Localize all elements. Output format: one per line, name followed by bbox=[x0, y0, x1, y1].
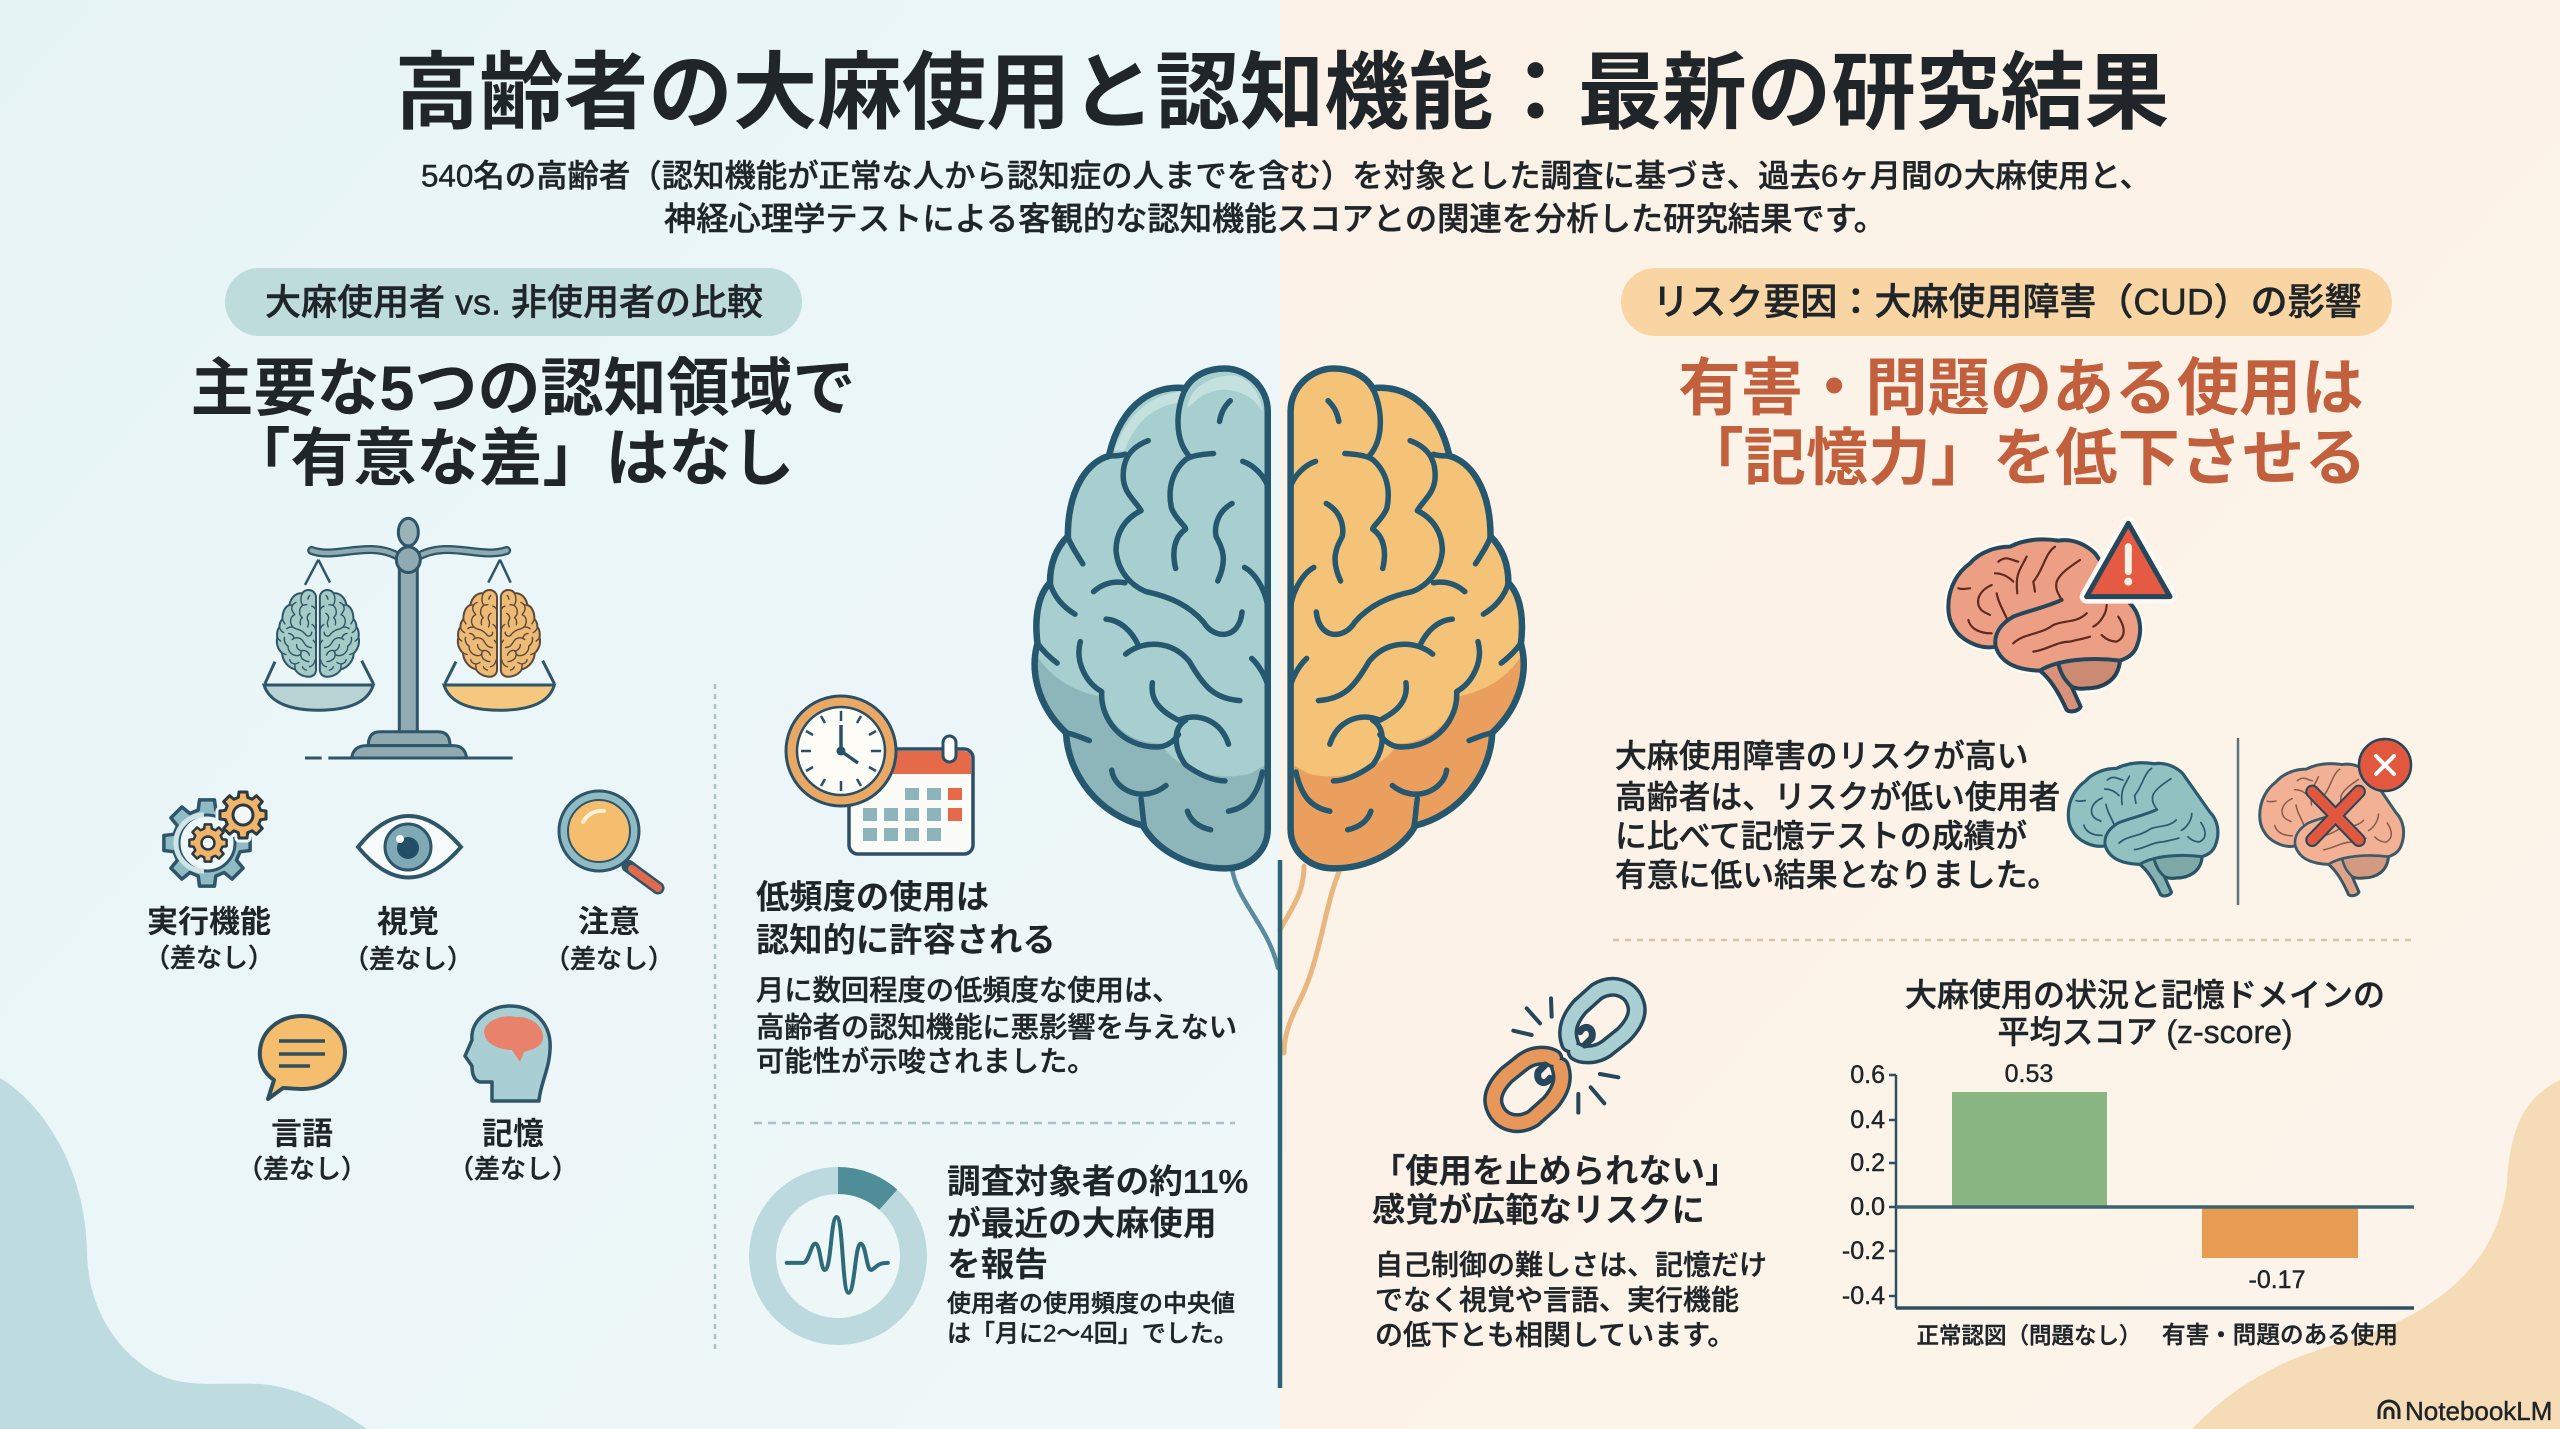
chart: memory z-score bbox=[1842, 977, 2414, 1349]
y axis: 0.4 bbox=[1850, 1106, 1885, 1134]
icon: clock bbox=[786, 696, 896, 806]
bar: normal cognition bbox=[1952, 1092, 2107, 1207]
y axis: 0.0 bbox=[1850, 1193, 1885, 1221]
text: self control bbox=[1375, 1250, 1767, 1350]
heading: 11 percent: が最近の大麻使用 bbox=[947, 1204, 1217, 1243]
chart title: 平均スコア (z-score) bbox=[1997, 1014, 2293, 1050]
pill: comparison label: 大麻使用者 vs. 非使用者の比較 bbox=[265, 282, 763, 322]
pill: comparison label bbox=[225, 268, 802, 336]
item: executive function bbox=[144, 792, 274, 973]
text: low frequency body: 可能性が示唆されました。 bbox=[756, 1045, 1096, 1077]
icon: teal brain bbox=[2068, 763, 2218, 896]
text: low frequency body: 高齢者の認知機能に悪影響を与えない bbox=[756, 1011, 1237, 1043]
item: memory: （差なし） bbox=[448, 1154, 578, 1184]
category labels: 有害・問題のある使用 bbox=[2162, 1322, 2398, 1349]
text: frequency median: 使用者の使用頻度の中央値 bbox=[947, 1290, 1235, 1318]
panel: 11 percent bbox=[762, 1163, 1248, 1348]
text: CUD risk: に比べて記憶テストの成績が bbox=[1615, 818, 2027, 854]
heading: low frequency bbox=[756, 880, 1056, 960]
subtitle: 540名の高齢者（認知機能が正常な人から認知症の人までを含む）を対象とした調査に基づき、過去6ヶ月間の大麻使用と、 bbox=[421, 158, 2151, 194]
icon: calendar bbox=[849, 736, 973, 854]
y axis: -0.2 bbox=[1842, 1237, 1885, 1265]
text: low frequency body bbox=[756, 974, 1237, 1077]
title: 高齢者の大麻使用と認知機能：最新の研究結果 bbox=[395, 46, 2169, 140]
y axis: 0.6 bbox=[1850, 1061, 1885, 1089]
bar: harmful use bbox=[2202, 1207, 2358, 1258]
item: vision: （差なし） bbox=[343, 944, 473, 974]
text: CUD risk bbox=[1615, 738, 2060, 893]
heading: 11 percent: 調査対象者の約11% bbox=[947, 1163, 1248, 1201]
right hemisphere bbox=[1287, 369, 1526, 876]
item: language bbox=[237, 1016, 367, 1184]
icon: balance scale with two brains bbox=[264, 518, 554, 758]
item: language: 言語 bbox=[271, 1116, 333, 1152]
item: executive function: （差なし） bbox=[144, 943, 274, 973]
item: attention bbox=[544, 791, 674, 974]
icon: small teal brain bbox=[277, 590, 359, 677]
icon: eye bbox=[358, 816, 461, 878]
heading: harmful use lowers memory: 「記憶力」を低下させる bbox=[1681, 424, 2367, 494]
item: language: （差なし） bbox=[237, 1154, 367, 1184]
heading: harmful use lowers memory: 有害・問題のある使用は bbox=[1678, 354, 2364, 424]
heading: 11 percent: を報告 bbox=[947, 1246, 1048, 1284]
panel: right risk factor bbox=[1615, 268, 2411, 905]
heading: low frequency: 低頻度の使用は bbox=[756, 880, 989, 916]
text: CUD risk: 大麻使用障害のリスクが高い bbox=[1615, 738, 2028, 774]
chart title bbox=[1905, 977, 2385, 1050]
item: vision bbox=[343, 816, 473, 974]
y axis: -0.4 bbox=[1842, 1282, 1885, 1310]
heading: no significant difference bbox=[190, 354, 856, 494]
text: self control: 自己制御の難しさは、記憶だけ bbox=[1375, 1250, 1767, 1280]
icon: speech bubble bbox=[260, 1016, 345, 1099]
icon: donut with pulse bbox=[762, 1180, 914, 1332]
center brain bbox=[1032, 369, 1526, 1388]
heading: no significant difference: 「有意な差」はなし bbox=[228, 424, 794, 494]
pill: risk label bbox=[1621, 268, 2392, 336]
subtitle bbox=[421, 158, 2151, 237]
y axis: 0.2 bbox=[1850, 1149, 1885, 1177]
logo: NotebookLM: NotebookLM bbox=[2405, 1396, 2552, 1426]
item: memory bbox=[448, 1006, 578, 1184]
value labels: 0.53 bbox=[2005, 1060, 2053, 1088]
panel: loss of control bbox=[1372, 987, 1767, 1350]
heading: cannot stop: 「使用を止められない」 bbox=[1372, 1154, 1738, 1190]
y axis bbox=[1842, 1061, 1896, 1310]
text: CUD risk: 高齢者は、リスクが低い使用者 bbox=[1615, 779, 2060, 815]
text: self control: の低下とも相関しています。 bbox=[1375, 1320, 1735, 1350]
heading: no significant difference: 主要な5つの認知領域で bbox=[190, 354, 856, 424]
heading: low frequency: 認知的に許容される bbox=[756, 922, 1056, 960]
icon: damaged brain with cross bbox=[2260, 739, 2411, 896]
heading: cannot stop bbox=[1372, 1154, 1738, 1230]
category labels bbox=[1916, 1322, 2398, 1349]
chart title: 大麻使用の状況と記憶ドメインの bbox=[1905, 977, 2385, 1013]
icon: broken chain bbox=[1493, 987, 1637, 1123]
panel: low frequency use bbox=[756, 696, 1237, 1077]
icon: head with brain bbox=[465, 1006, 550, 1101]
item: attention: （差なし） bbox=[544, 944, 674, 974]
brain stems bbox=[1232, 866, 1339, 1053]
pill: risk label: リスク要因：大麻使用障害（CUD）の影響 bbox=[1652, 282, 2362, 322]
text: frequency median bbox=[947, 1290, 1238, 1348]
item: executive function: 実行機能 bbox=[147, 904, 271, 940]
text: CUD risk: 有意に低い結果となりました。 bbox=[1615, 857, 2059, 893]
icon: small orange brain bbox=[458, 590, 540, 677]
text: self control: でなく視覚や言語、実行機能 bbox=[1375, 1284, 1739, 1316]
icon: magnifying glass bbox=[559, 791, 658, 888]
heading: cannot stop: 感覚が広範なリスクに bbox=[1372, 1192, 1705, 1230]
text: frequency median: は「月に2〜4回」でした。 bbox=[947, 1320, 1238, 1348]
subtitle: 神経心理学テストによる客観的な認知機能スコアとの関連を分析した研究結果です。 bbox=[664, 201, 1886, 237]
item: attention: 注意 bbox=[578, 904, 640, 940]
icon: brain with warning bbox=[1948, 523, 2170, 711]
heading: harmful use lowers memory bbox=[1678, 354, 2367, 494]
item: memory: 記憶 bbox=[482, 1116, 544, 1152]
text: low frequency body: 月に数回程度の低頻度な使用は、 bbox=[756, 974, 1180, 1006]
left hemisphere bbox=[1032, 369, 1271, 876]
panel: left comparison bbox=[144, 268, 856, 1184]
category labels: 正常認図（問題なし） bbox=[1916, 1324, 2142, 1348]
value labels: -0.17 bbox=[2249, 1266, 2305, 1294]
value labels bbox=[2005, 1060, 2305, 1294]
icon: gears bbox=[164, 792, 266, 886]
heading: 11 percent bbox=[947, 1163, 1248, 1284]
item: vision: 視覚 bbox=[377, 904, 439, 940]
